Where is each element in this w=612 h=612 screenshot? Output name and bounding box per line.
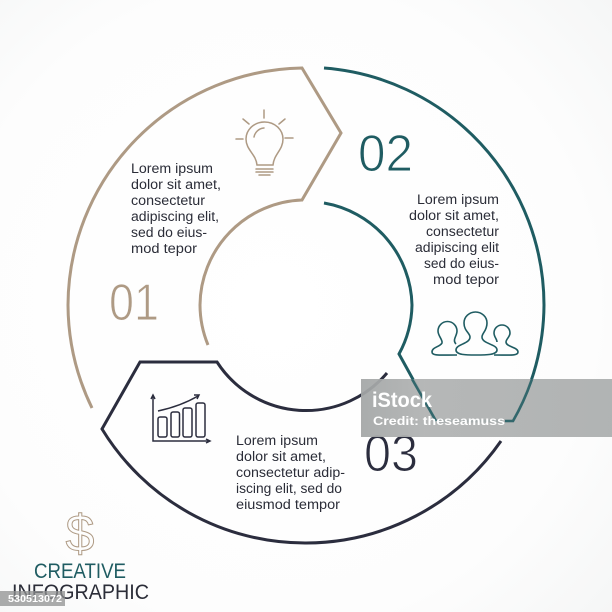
watermark credit: Credit: theseamuss — [373, 414, 505, 428]
panel 01: tan arrow segment — [68, 68, 341, 408]
text block 02: sed do eius- — [424, 256, 499, 271]
number 03: 03 — [364, 425, 418, 483]
teal line under watermark — [412, 379, 532, 421]
text block 02: adipiscing elit — [415, 240, 499, 255]
panel 03: dark arrow segment — [102, 362, 501, 543]
image id tag — [0, 591, 65, 606]
text block 03: Lorem ipsum — [236, 433, 318, 448]
icon: bar chart — [151, 395, 210, 443]
watermark brand: iStock — [372, 389, 432, 412]
text block 02: consectetur — [426, 224, 500, 239]
text block 01: sed do eius- — [131, 225, 207, 240]
text block 01: mod tepor — [131, 241, 198, 256]
text block 01: adipiscing elit, — [131, 209, 219, 224]
title line: CREATIVE: CREATIVE — [34, 560, 126, 583]
number 01: 01 — [109, 274, 159, 332]
text block 03: iscing elit, sed do — [236, 481, 342, 496]
image id number: 530513072 — [8, 593, 62, 605]
watermark band — [361, 379, 612, 437]
icon: dollar sign: $ — [66, 505, 95, 563]
text block 03: eiusmod tempor — [236, 497, 341, 512]
teal segment outline — [324, 68, 544, 421]
text block 01: consectetur — [131, 193, 206, 208]
panel 02: teal arrow segment — [324, 68, 544, 421]
text block 02: Lorem ipsum — [417, 192, 499, 207]
brand title — [12, 560, 149, 604]
text block 02: dolor sit amet, — [409, 208, 499, 223]
icon: people group — [432, 312, 518, 355]
tan segment outline — [68, 68, 341, 408]
icon: light bulb — [236, 110, 293, 175]
text block 03: consectetur adip- — [236, 465, 345, 480]
text block 02: mod tepor — [433, 272, 500, 287]
title line: INFOGRAPHIC: INFOGRAPHIC — [12, 581, 149, 604]
text block 01: dolor sit amet, — [131, 177, 221, 192]
dark segment outline — [102, 362, 501, 543]
number 02: 02 — [358, 125, 413, 183]
text block 03: dolor sit amet, — [236, 449, 326, 464]
text block 01: Lorem ipsum — [131, 161, 213, 176]
